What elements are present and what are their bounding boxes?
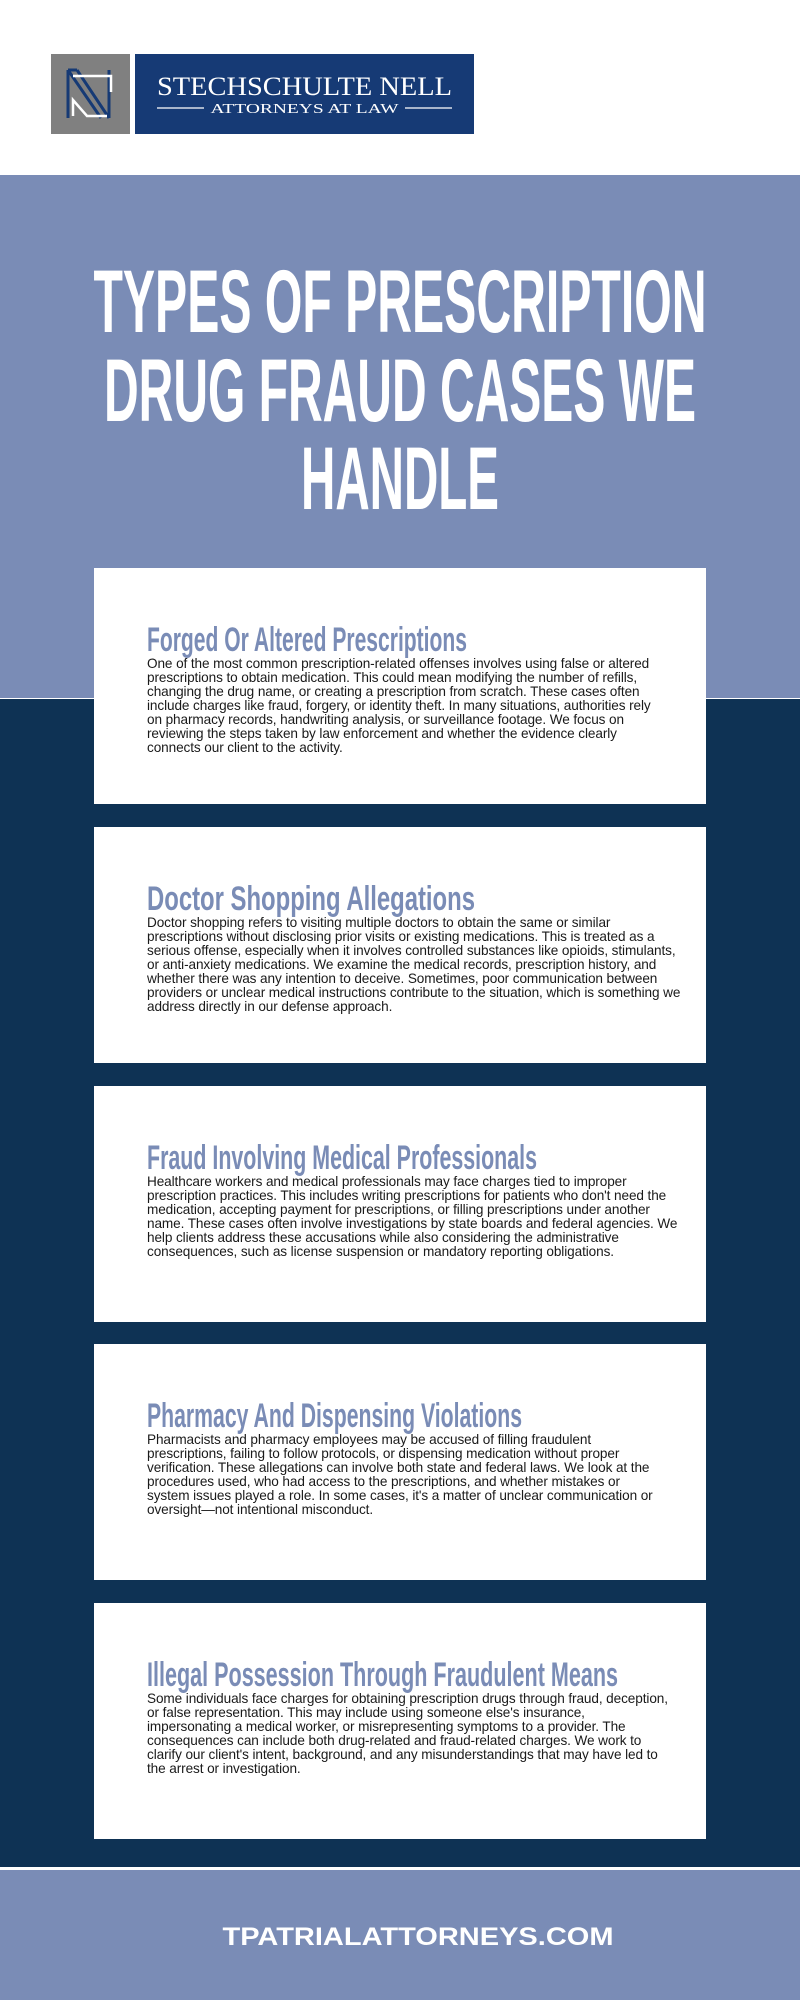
text: verification. These allegations can involve both state and federal laws. We look at the [147,1460,649,1475]
panel: illegal possession [94,1603,706,1839]
logo wordmark [135,54,474,134]
logo wordmark: STECHSCHULTE NELL [157,72,452,101]
text: procedures used, who had access to the prescriptions, and whether mistakes or [147,1474,620,1489]
title: HANDLE [301,428,499,528]
text: oversight—not intentional misconduct. [147,1502,373,1517]
text: serious offense, especially when it involves controlled substances like opioids, stimulants, [147,943,676,958]
header light band [0,175,800,698]
logo wordmark: ATTORNEYS AT LAW [210,102,400,117]
text [147,1432,653,1517]
text: help clients address these accusations while also considering the administrative [147,1230,619,1245]
text: Some individuals face charges for obtaining prescription drugs through fraud, deception, [147,1691,668,1706]
panel: pharmacy violations [94,1344,706,1580]
panel: doctor shopping [94,827,706,1063]
text: clarify our client's intent, background, and any misunderstandings that may have led to [147,1747,658,1762]
logo icon: monogram [51,54,130,134]
text: address directly in our defense approach. [147,999,392,1014]
text: or anti-anxiety medications. We examine the medical records, prescription history, and [147,957,656,972]
text [147,1691,668,1776]
text: prescriptions, failing to follow protocols, or dispensing medication without proper [147,1446,619,1461]
text: Doctor shopping refers to visiting multiple doctors to obtain the same or similar [147,915,610,930]
text: connects our client to the activity. [147,740,343,755]
heading: Doctor Shopping Allegations [147,880,475,918]
dark navy band [0,699,800,1867]
text [147,915,680,1014]
text: include charges like fraud, forgery, or identity theft. In many situations, authorities rely [147,698,651,713]
text: prescriptions to obtain medication. This could mean modifying the number of refills, [147,670,637,685]
text: consequences can include both drug-related and fraud-related charges. We work to [147,1733,641,1748]
panel: medical professionals [94,1086,706,1322]
text: impersonating a medical worker, or misrepresenting symptoms to a provider. The [147,1719,626,1734]
heading: Forged Or Altered Prescriptions [147,621,467,659]
text: Healthcare workers and medical professionals may face charges tied to improper [147,1174,627,1189]
text: the arrest or investigation. [147,1761,301,1776]
text: One of the most common prescription-related offenses involves using false or altered [147,656,649,671]
text [147,1174,677,1259]
text: providers or unclear medical instructions contribute to the situation, which is something we [147,985,680,1000]
text: changing the drug name, or creating a prescription from scratch. These cases often [147,684,640,699]
text: whether there was any intention to deceive. Sometimes, poor communication between [147,971,657,986]
panel: forged or altered prescriptions [94,568,706,804]
text: prescriptions without disclosing prior visits or existing medications. This is treated as a [147,929,654,944]
text: system issues played a role. In some cases, it's a matter of unclear communication or [147,1488,653,1503]
title [94,251,706,528]
text: name. These cases often involve investigations by state boards and federal agencies. We [147,1216,677,1231]
logo [51,54,474,134]
footer url: TPATRIALATTORNEYS.COM [222,1923,614,1951]
text: consequences, such as license suspension or mandatory reporting obligations. [147,1244,614,1259]
text: prescription practices. This includes writing prescriptions for patients who don't need the [147,1188,666,1203]
text: on pharmacy records, handwriting analysis, or surveillance footage. We focus on [147,712,624,727]
text: Pharmacists and pharmacy employees may be accused of filling fraudulent [147,1432,591,1447]
text: or false representation. This may include using someone else's insurance, [147,1705,585,1720]
footer band [0,1870,800,2000]
text: medication, accepting payment for prescriptions, or filling prescriptions under another [147,1202,650,1217]
text: reviewing the steps taken by law enforcement and whether the evidence clearly [147,726,617,741]
text [147,656,651,755]
